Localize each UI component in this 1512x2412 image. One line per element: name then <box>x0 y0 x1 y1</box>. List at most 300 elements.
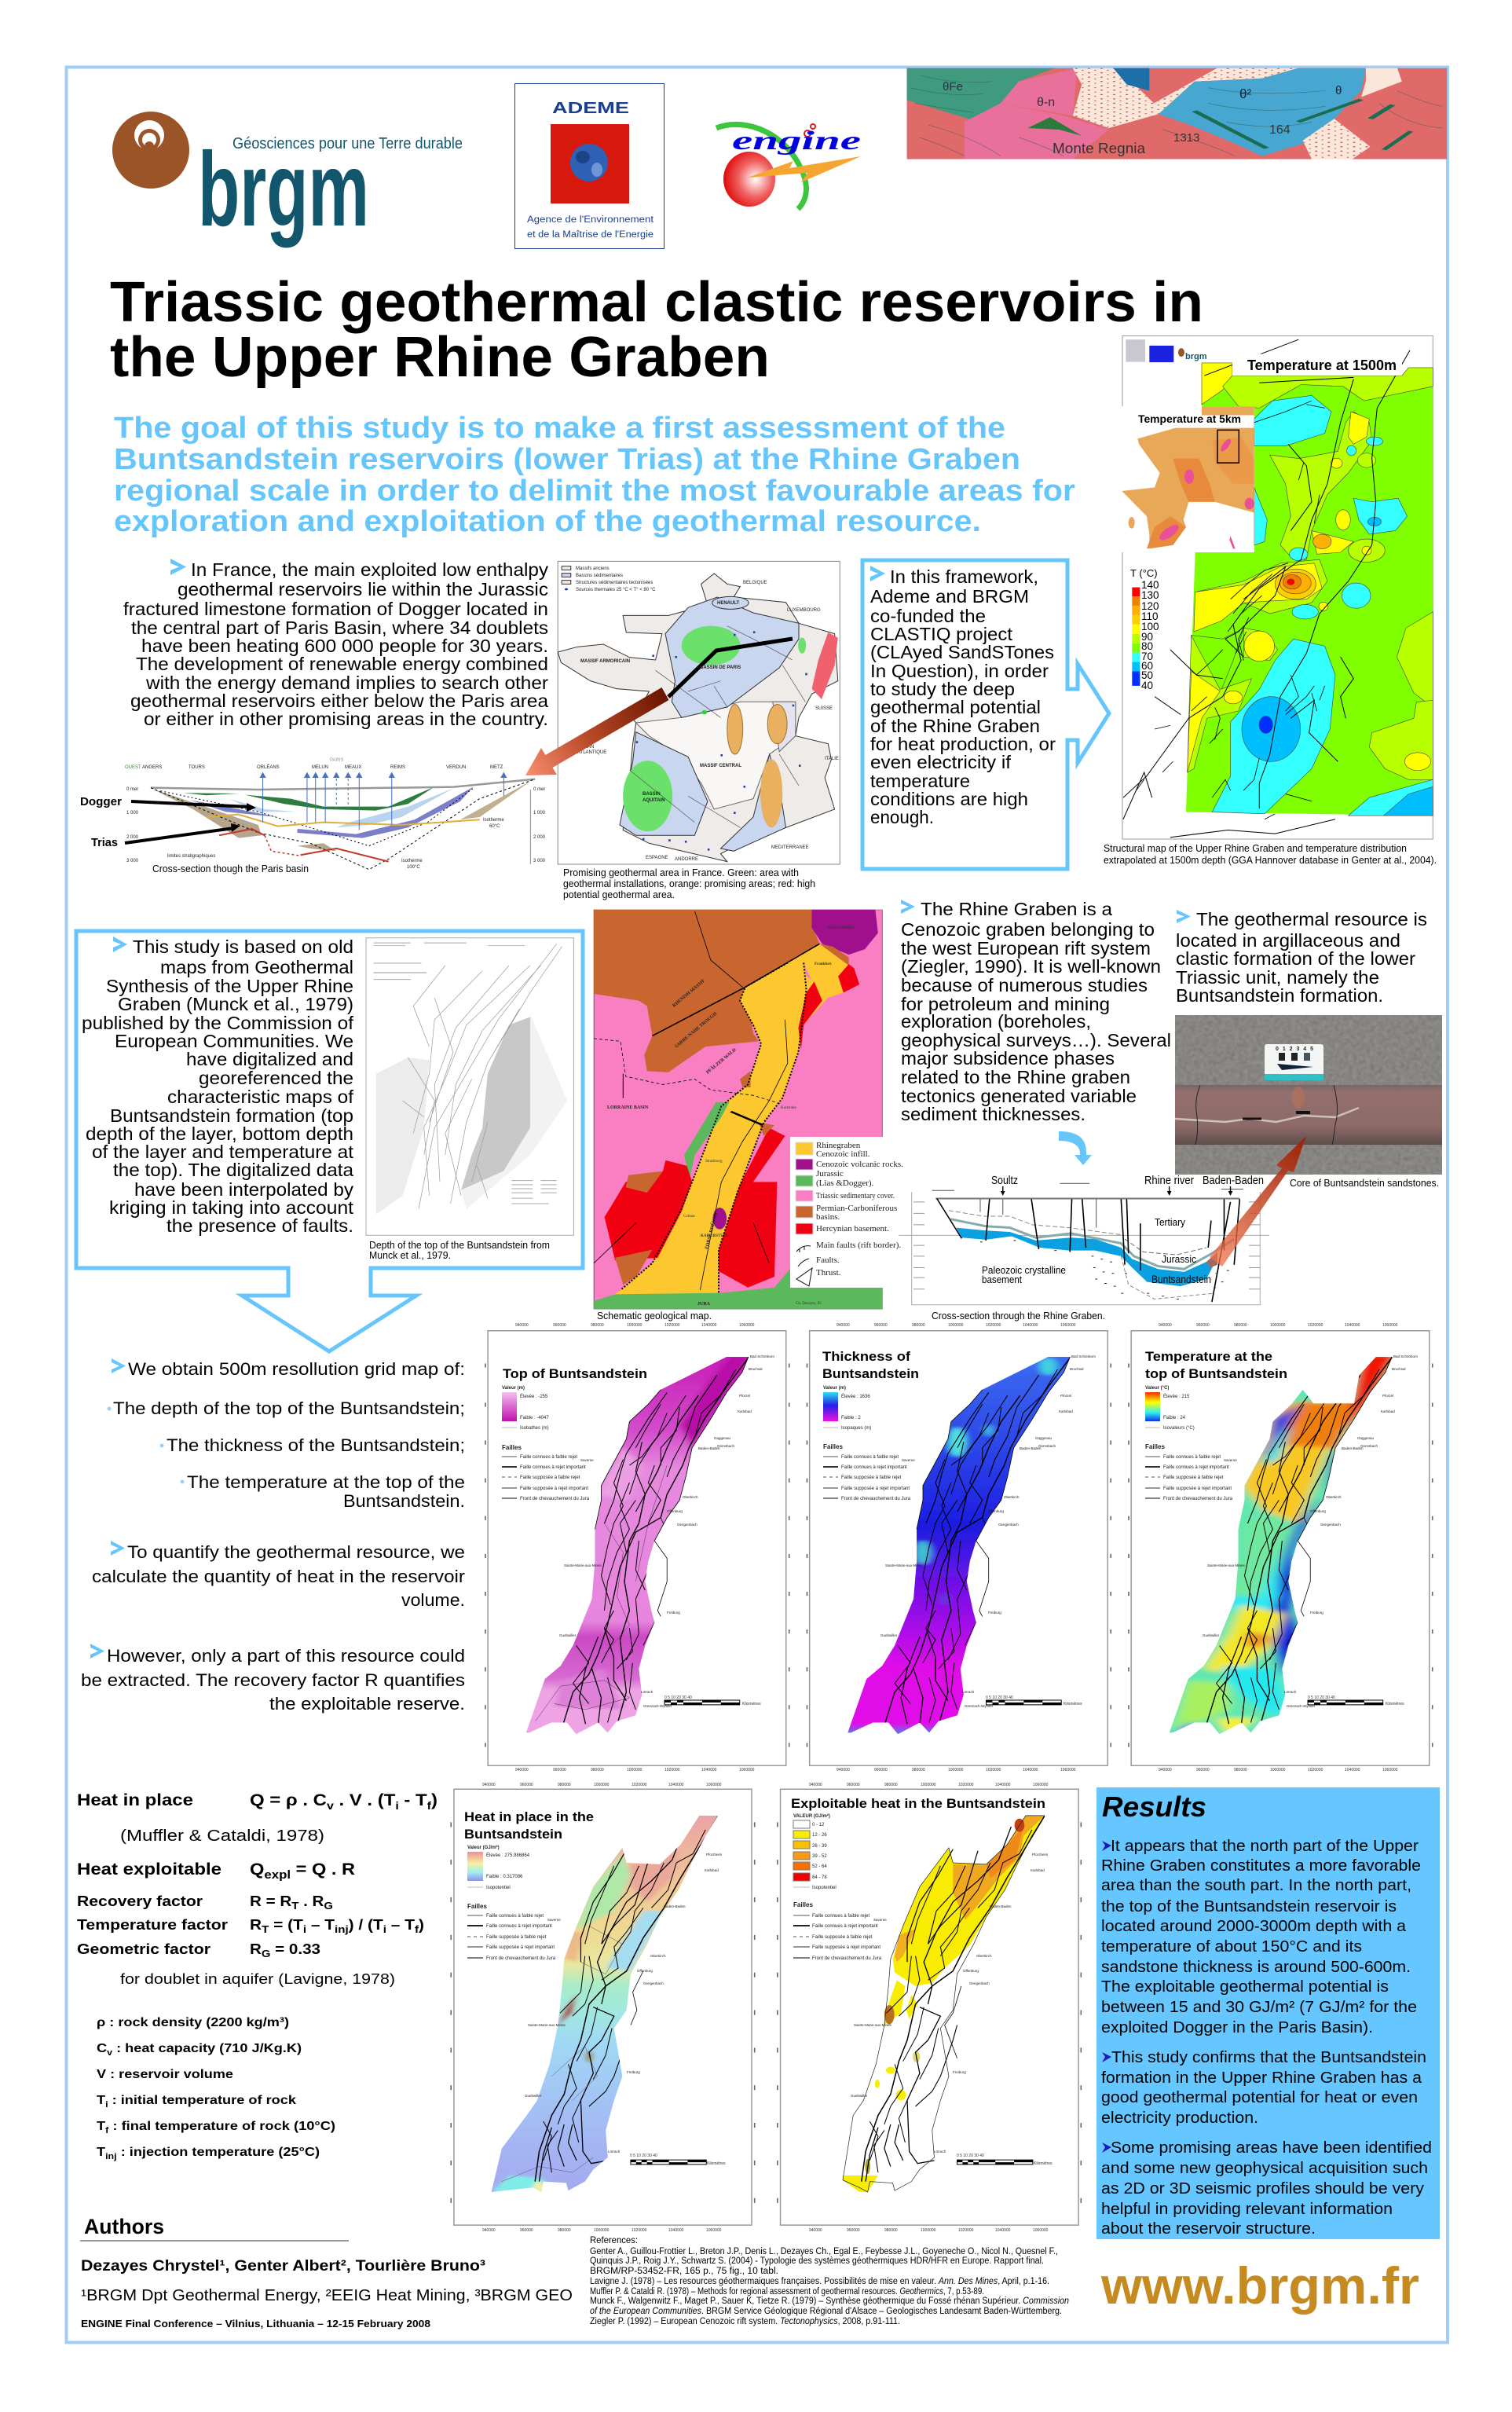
city labels: Saverne <box>547 1918 561 1922</box>
text block: Rhine Graben description: tectonics generated variable <box>901 1086 1137 1106</box>
text block: grid maps and quantities: be extracted. The recovery factor R quantifies <box>81 1670 465 1690</box>
text block: study description: European Communities. We <box>115 1031 353 1051</box>
city labels: Baden-Baden <box>698 1446 720 1450</box>
map legend: Faille connues à faible rejet <box>841 1455 899 1460</box>
map axis and scale labels: 1040000 <box>1345 1768 1360 1772</box>
map axis and scale labels: 940000 <box>482 2228 496 2233</box>
formula: temperature factor: = (T <box>269 1917 303 1933</box>
text block: geothermal resource: Triassic unit, namely the <box>1176 967 1379 988</box>
inset: temperature at 5km <box>1121 406 1254 552</box>
city labels: Gengenbach <box>677 1523 697 1527</box>
map legend: Front de chevauchement du Jura <box>1163 1497 1233 1501</box>
map axis and scale labels: 1020000 <box>664 1323 680 1328</box>
map legend: Isopotentiel <box>812 1886 837 1890</box>
city labels <box>525 1853 723 2154</box>
map: promising geothermal areas in France <box>558 561 840 864</box>
parameter definitions <box>97 2016 335 2161</box>
map axis and scale labels: 980000 <box>1234 1323 1247 1328</box>
heading: results: Results <box>1102 1791 1206 1823</box>
map axis and scale labels: 1060000 <box>706 1783 722 1787</box>
map axis and scale labels: 940000 <box>1159 1768 1172 1772</box>
formula: heat in place: - T <box>399 1791 427 1809</box>
map legend: Élevée : 1636 <box>841 1394 870 1399</box>
map axis and scale labels: 1060000 <box>1382 1768 1398 1772</box>
legend: temperature: 110 <box>1141 610 1159 622</box>
result 3 <box>1101 2139 1432 2238</box>
city labels: Grenzach-Wyhlen <box>1287 1704 1315 1708</box>
text block: CLASTIQ: enough. <box>870 807 934 827</box>
text block: Rhine Graben description: because of numerous studies <box>901 975 1148 995</box>
parameter definitions: T <box>97 2146 104 2159</box>
map labels: MASSIF ARMORICAIN <box>580 659 630 664</box>
map axis and scale labels: 0 5 10 20 30 40 <box>957 2154 984 2158</box>
legend: geology: (Lias &Dogger). <box>816 1179 874 1188</box>
city labels: Offenburg <box>637 1969 653 1973</box>
cross-section labels: Isotherme <box>401 859 423 863</box>
references: Genter A., Guillou-Frottier L., Breton J.P., Denis L., Dezayes Ch., Egal E., Feybesse J.L., Goyeneche O., Nicol N., Quesnel F., <box>590 2247 1058 2256</box>
city labels: Freiburg <box>1310 1611 1323 1615</box>
city labels: Pforzel <box>1060 1394 1071 1398</box>
cross-section labels: 3 000 <box>533 859 546 863</box>
legend: temperature: 130 <box>1141 589 1159 601</box>
geological map banner: θ <box>1335 84 1342 97</box>
map axis and scale labels: 940000 <box>1159 1323 1172 1328</box>
panel: results <box>1096 1787 1440 2239</box>
city labels: Baden-Baden <box>664 1904 686 1908</box>
city labels: Sainte-Marie-aux-Mines <box>528 2023 566 2027</box>
bullet list: The thickness of the Buntsandstein; <box>167 1435 465 1455</box>
map axis and scale labels: 940000 <box>515 1768 529 1772</box>
map legend: Faille supposée à faible rejet <box>1163 1475 1224 1480</box>
map: thickness of Buntsandstein <box>807 1323 1111 1772</box>
goal statement: exploration and exploitation of the geothermal resource. <box>114 505 981 538</box>
map axis and scale labels: 0 5 10 20 30 40 <box>1308 1695 1335 1700</box>
city labels <box>851 1853 1049 2154</box>
text block: CLASTIQ: geothermal potential <box>870 697 1041 717</box>
formula: temperature factor: Temperature factor <box>77 1917 228 1933</box>
title: temperature at 5km: Temperature at 5km <box>1138 413 1241 425</box>
map labels: ITALIE <box>825 757 839 761</box>
bullet list <box>107 1398 465 1511</box>
text block: study description: the top). The digitalized data <box>113 1160 353 1180</box>
formula: geometric factor <box>77 1941 320 1959</box>
logo: ADEME: et de la Maîtrise de l'Energie <box>527 230 653 240</box>
text block: grid maps and quantities: volume. <box>401 1590 465 1610</box>
formula: heat exploitable: Heat exploitable <box>77 1860 221 1879</box>
city labels: Baden-Baden <box>1342 1446 1364 1450</box>
map labels: BASSIN <box>643 792 661 797</box>
map labels <box>576 566 839 862</box>
text block: study description: Graben (Munck et al., 1979) <box>118 994 353 1014</box>
text block: Rhine Graben description: major subsidence phases <box>901 1048 1115 1069</box>
map axis and scale labels: 1000000 <box>627 1768 643 1772</box>
bullet list: The depth of the top of the Buntsandstein; <box>113 1398 465 1418</box>
text block: Rhine Graben description <box>901 899 1171 1124</box>
photo: sandstone core <box>1175 1015 1442 1175</box>
legend: geology: Permian-Carboniferous <box>816 1204 897 1213</box>
map labels: AQUITAIN <box>643 798 665 803</box>
text block: CLASTIQ: of the Rhine Graben <box>870 716 1040 736</box>
map axis and scale labels: 940000 <box>809 2228 822 2233</box>
text block: CLASTIQ: conditions are high <box>870 789 1028 809</box>
map legend: Isovaleurs (°C) <box>1163 1426 1195 1431</box>
tagline: Géosciences pour une Terre durable <box>232 135 463 152</box>
caption: core: Core of Buntsandstein sandstones. <box>1290 1177 1439 1189</box>
geological map labels: Colmar <box>683 1215 695 1219</box>
city labels <box>1203 1354 1419 1708</box>
map legend <box>467 1845 556 1961</box>
text block: France low enthalpy <box>123 559 549 729</box>
text block: grid maps and quantities: However, only a part of this resource could <box>107 1646 465 1666</box>
legend: temperature: 120 <box>1141 600 1159 612</box>
text block: grid maps and quantities: To quantify the geothermal resource, we <box>127 1542 465 1562</box>
section labels: Jurassic <box>1162 1253 1196 1265</box>
parameter definitions: f <box>105 2126 109 2135</box>
cross-section labels: 3 000 <box>126 859 139 863</box>
map axis and scale labels <box>809 1783 1053 2233</box>
caption: France map <box>563 867 815 900</box>
formula: recovery factor: . R <box>298 1893 324 1909</box>
geological map labels: JURA <box>697 1302 711 1307</box>
formula: heat exploitable: expl <box>264 1868 291 1882</box>
geological map banner: θFe <box>943 80 963 93</box>
map legend: 52 - 64 <box>812 1864 827 1869</box>
map axis and scale labels: 0 5 10 20 30 40 <box>630 2154 657 2158</box>
city labels: Saverne <box>902 1458 915 1462</box>
references: Muffler P. & Cataldi R. (1978) – Methods for regional assessment of geothermal resources. Geothermics, 7, p.53-89. <box>590 2287 984 2297</box>
result 1: sandstone thickness is around 500-600m. <box>1101 1959 1411 1976</box>
icon: chevron <box>111 1541 125 1556</box>
section labels: Rhine river <box>1144 1174 1194 1187</box>
city labels: Gengenbach <box>1320 1523 1341 1527</box>
result 2: electricity production. <box>1101 2110 1258 2127</box>
map axis and scale labels: 1000000 <box>948 1323 964 1328</box>
references: References: <box>590 2234 638 2245</box>
map axis and scale labels: 1060000 <box>1033 2228 1049 2233</box>
bullet list: Buntsandstein. <box>343 1491 465 1511</box>
geological map labels: SARRE-NAHE TROUGH <box>674 1011 718 1050</box>
colour scale <box>1132 588 1140 596</box>
city labels: Freiburg <box>988 1611 1001 1615</box>
logo: ENGINE <box>716 124 861 209</box>
city labels <box>559 1354 775 1708</box>
map legend: Faille connues à rejet important <box>841 1465 907 1470</box>
section labels: basement <box>982 1274 1022 1285</box>
formula: heat in place: ) <box>431 1791 437 1809</box>
map legend: 12 - 26 <box>812 1833 827 1838</box>
references: Quinquis J.P., Roig J.Y., Schwartz S. (2004) - Typologie des systèmes géothermiques HDR/HFR en Europe. Rapport final. <box>590 2256 1044 2266</box>
core scale card <box>1265 1044 1323 1080</box>
map axis and scale labels <box>837 1323 1082 1772</box>
map legend: Faille supposée à faible rejet <box>841 1475 902 1480</box>
city labels: Bruchsal <box>749 1367 763 1371</box>
map title <box>1145 1349 1287 1381</box>
map axis and scale labels: 1000000 <box>594 1783 610 1787</box>
result 1: located around 2000-3000m depth with a <box>1101 1918 1407 1935</box>
text block: grid maps and quantities: the exploitable reserve. <box>269 1694 465 1714</box>
legend: geology: Rhinegraben <box>816 1141 861 1150</box>
legend: temperature: 100 <box>1141 621 1159 632</box>
cross-section labels <box>125 758 546 870</box>
map legend: 39 - 52 <box>812 1854 827 1859</box>
map axis and scale labels: 980000 <box>912 1323 925 1328</box>
caption: Munck map: Munck et al., 1979. <box>369 1249 451 1261</box>
city labels: Saverne <box>580 1458 594 1462</box>
text block: CLASTIQ: In Question), in order <box>870 661 1049 681</box>
city labels: Gengenbach <box>969 1981 990 1985</box>
map axis and scale labels: 1000000 <box>921 2228 936 2233</box>
city labels: Sainte-Marie-aux-Mines <box>564 1563 602 1567</box>
legend: geology: Jurassic <box>816 1169 844 1179</box>
map axis and scale labels: 1000000 <box>1270 1323 1286 1328</box>
map axis and scale labels: 1020000 <box>958 2228 974 2233</box>
text block: CLASTIQ: Ademe and BRGM <box>870 586 1029 607</box>
formula: temperature factor <box>77 1917 424 1935</box>
caption: France map: potential geothermal area. <box>563 889 675 900</box>
formula: recovery factor: Recovery factor <box>77 1893 203 1909</box>
icon: chevron <box>113 937 127 952</box>
formula: geometric factor: G <box>262 1948 270 1959</box>
map axis and scale labels: 1040000 <box>701 1323 717 1328</box>
map axis and scale labels: 980000 <box>558 1783 571 1787</box>
parameter definitions: T <box>97 2094 104 2107</box>
city labels: Pforzel <box>1382 1394 1393 1398</box>
result 1: between 15 and 30 GJ/m² (7 GJ/m² for the <box>1101 1999 1417 2016</box>
city labels: Guebwiller <box>851 2094 868 2098</box>
result 1: It appears that the north part of the Upper <box>1111 1838 1419 1855</box>
legend: temperature: 50 <box>1141 669 1153 681</box>
map: depth of the top of the Buntsandstein (Munck) <box>366 938 573 1235</box>
map axis and scale labels: 980000 <box>884 2228 898 2233</box>
text block: geothermal resource <box>1176 909 1427 1006</box>
legend: geology: Thrust. <box>816 1268 841 1277</box>
survey line on map <box>668 639 793 697</box>
map axis and scale labels: 960000 <box>847 1783 860 1787</box>
map: top of Buntsandstein <box>485 1323 789 1772</box>
result 3: about the reservoir structure. <box>1101 2220 1316 2238</box>
map labels: Structures sédimentaires tectonisées <box>576 581 653 585</box>
formula: temperature factor: R <box>250 1917 260 1933</box>
formula: recovery factor: R = R <box>250 1893 287 1909</box>
panel: CLASTIQ project arrow box <box>862 560 1109 869</box>
map axis and scale labels: 960000 <box>520 1783 533 1787</box>
map axis and scale labels: 1000000 <box>1270 1768 1286 1772</box>
text block: CLASTIQ: (CLAyed SandSTones <box>870 642 1054 662</box>
text block: geothermal resource: Buntsandstein formation. <box>1176 985 1383 1006</box>
map legend: Faible : 24 <box>1163 1416 1186 1420</box>
legend: geology: Cenozoic volcanic rocks. <box>816 1160 903 1169</box>
city labels: Freiburg <box>627 2070 640 2074</box>
cross-section labels: OUEST <box>125 765 141 770</box>
geological map banner <box>907 68 1447 159</box>
text block: Rhine Graben description: sediment thicknesses. <box>901 1104 1085 1124</box>
city labels <box>880 1354 1096 1708</box>
map axis and scale labels: 960000 <box>520 2228 533 2233</box>
references: Lavigne J. (1978) – Les resources géothermaiques françaises. Possibilités de mise en valeur. Ann. Des Mines, April, p.1-16. <box>590 2277 1049 2286</box>
formula: temperature factor: inj <box>335 1923 349 1935</box>
map axis and scale labels: Kilomètres <box>1064 1702 1082 1706</box>
caption: geological map: Schematic geological map. <box>597 1310 712 1321</box>
map labels: SUISSE <box>815 706 833 711</box>
references: Munck F., Walgenwitz F., Maget P., Sauer K, Tietze R. (1979) – Synthèse géothermique du Fossé rhénan Supérieur. Commission <box>590 2297 1069 2306</box>
map labels: MEDITERRANEE <box>771 845 809 850</box>
legend: temperature: 70 <box>1141 651 1153 662</box>
map legend: 64 - 78 <box>812 1875 827 1880</box>
citation: Lavigne: for doublet in aquifer (Lavigne, 1978) <box>120 1971 395 1987</box>
formula: heat in place: . V . (T <box>334 1791 396 1809</box>
city labels: Gernsbach <box>1360 1444 1378 1448</box>
text block: geothermal resource: located in argillaceous and <box>1176 930 1400 951</box>
text block: grid maps and quantities: We obtain 500m resollution grid map of: <box>128 1359 465 1379</box>
result 3: helpful in providing relevant information <box>1101 2201 1393 2218</box>
title: temperature at 1500m: Temperature at 1500m <box>1247 357 1397 373</box>
map labels: BELGIQUE <box>743 581 767 585</box>
panel: study data arrow box <box>76 931 583 1351</box>
formula: temperature factor: – T <box>306 1917 335 1933</box>
map legend: Faible : -4047 <box>520 1416 549 1420</box>
geological map labels <box>607 926 855 1307</box>
map labels: ANDORRE <box>675 857 698 862</box>
result 2: This study confirms that the Buntsandstein <box>1111 2049 1426 2066</box>
map legend: Faille supposée à rejet important <box>841 1486 910 1491</box>
city labels: Guebwiller <box>880 1633 898 1637</box>
map axis and scale labels: 1040000 <box>995 1783 1011 1787</box>
caption: Munck map <box>369 1239 550 1261</box>
map axis and scale labels: Kilomètres <box>742 1702 761 1706</box>
legend: temperature: 80 <box>1141 640 1153 652</box>
formula: temperature factor: T <box>262 1923 269 1935</box>
city labels: Karlsbad <box>705 1868 719 1872</box>
result 2: formation in the Upper Rhine Graben has a <box>1101 2069 1422 2087</box>
map axis and scale labels: 1060000 <box>1033 1783 1049 1787</box>
legend: geology: Faults. <box>816 1255 840 1265</box>
text block: study description: depth of the layer, bottom depth <box>86 1124 353 1144</box>
map legend: Faille connues à rejet important <box>520 1465 586 1470</box>
text block: Rhine Graben description: Cenozoic graben belonging to <box>901 919 1155 940</box>
geological map banner: 164 <box>1269 123 1291 137</box>
city labels: Sainte-Marie-aux-Mines <box>1207 1563 1246 1567</box>
map axis and scale labels: 1040000 <box>668 1783 684 1787</box>
text block: Rhine Graben description: related to the Rhine graben <box>901 1067 1130 1087</box>
text block: study description: maps from Geothermal <box>160 957 353 977</box>
cross-section labels: 100°C <box>407 865 420 870</box>
map legend: Élevée : -255 <box>520 1394 548 1399</box>
map legend: VALEUR (GJ/m²) <box>793 1813 830 1819</box>
map title: Heat in place in the <box>464 1809 594 1824</box>
geological map labels: RHENISH MASSIF <box>672 978 706 1009</box>
formula: heat in place: Heat in place <box>77 1791 193 1809</box>
map axis and scale labels: 980000 <box>884 1783 898 1787</box>
map axis and scale labels: 1020000 <box>664 1768 680 1772</box>
map legend: Élevée : 275.986864 <box>486 1853 530 1858</box>
map title <box>822 1349 919 1381</box>
geological map labels: Karlsruhe <box>781 1106 796 1110</box>
city labels: Bruchsal <box>1392 1367 1406 1371</box>
map axis and scale labels: 940000 <box>482 1783 496 1787</box>
result 1: exploited Dogger in the Paris Basin). <box>1101 2019 1373 2036</box>
map axis and scale labels: 960000 <box>553 1768 566 1772</box>
map legend: Isopaques (m) <box>841 1426 871 1431</box>
caption: temperature map <box>1104 842 1437 866</box>
map legend: Faille supposée à faible rejet <box>812 1935 873 1940</box>
geological map labels: Frankfurt <box>815 962 832 966</box>
legend: geology <box>790 1137 903 1288</box>
map axis and scale labels: 0 5 10 20 30 40 <box>986 1695 1013 1700</box>
map legend: Faille connues à faible rejet <box>1163 1455 1221 1460</box>
cross-section labels: METZ <box>490 765 503 770</box>
text block: France low enthalpy: fractured limestone formation of Dogger located in <box>123 599 548 619</box>
map legend: Front de chevauchement du Jura <box>841 1497 911 1501</box>
title <box>110 271 1203 389</box>
cross-section labels: VERDUN <box>446 765 466 770</box>
city labels: Sainte-Marie-aux-Mines <box>854 2023 892 2027</box>
cross-section labels: 60°C <box>489 824 500 829</box>
map axis and scale labels: 1020000 <box>632 2228 647 2233</box>
icon: chevron <box>90 1644 104 1659</box>
text block: CLASTIQ: In this framework, <box>890 566 1038 587</box>
city labels: Oberkirch <box>683 1495 698 1499</box>
map labels: BASSIN DE PARIS <box>700 665 741 670</box>
geological map labels: KAISERSTUHL <box>701 1234 730 1238</box>
map axis and scale labels <box>1159 1323 1404 1772</box>
cross-section labels: Isotherme <box>483 818 504 823</box>
legend: temperature: 90 <box>1141 631 1153 643</box>
map title: Buntsandstein <box>464 1827 562 1842</box>
bullet list: The temperature at the top of the <box>187 1472 465 1492</box>
map axis and scale labels: 1040000 <box>668 2228 684 2233</box>
city labels: Gengenbach <box>998 1523 1019 1527</box>
author affiliations: ¹BRGM Dpt Geothermal Energy, ²EEIG Heat Mining, ³BRGM GEO <box>81 2287 573 2304</box>
map axis and scale labels: 1060000 <box>739 1768 755 1772</box>
geological map labels: Strasbourg <box>705 1160 723 1164</box>
map axis and scale labels: 940000 <box>837 1768 850 1772</box>
city labels: Bad Schönborn <box>1071 1354 1096 1358</box>
icon: chevron <box>901 900 915 914</box>
city labels: Baden-Baden <box>990 1904 1012 1908</box>
map legend: Front de chevauchement du Jura <box>812 1956 882 1961</box>
section labels: Paleozoic crystalline <box>982 1264 1066 1276</box>
city labels: Gernsbach <box>1038 1444 1056 1448</box>
map labels: Massifs anciens <box>576 566 610 571</box>
caption: temperature map: Structural map of the Upper Rhine Graben and temperature distribution <box>1104 842 1407 854</box>
city labels: Karlsbad <box>1031 1868 1045 1872</box>
cross-section labels: 2 000 <box>533 835 546 840</box>
icon: chevron <box>1177 910 1191 923</box>
text block: geothermal resource: clastic formation of the lower <box>1176 948 1415 969</box>
chart: Paris basin cross-section <box>80 758 546 874</box>
map legend: Valeur (m) <box>502 1386 525 1391</box>
text block: France low enthalpy: or either in other promising areas in the country. <box>144 709 548 729</box>
geological map banner: 1313 <box>1173 131 1199 145</box>
city labels: Saverne <box>1224 1458 1237 1462</box>
geological map labels: FORSE RHÉNAN <box>703 1211 719 1250</box>
text block: study description: characteristic maps of <box>167 1087 354 1107</box>
map legend: Élevée : 215 <box>1163 1394 1190 1399</box>
city labels: Gaggenau <box>1357 1436 1375 1440</box>
formula: temperature factor: – T <box>386 1917 415 1933</box>
map axis and scale labels: 940000 <box>515 1323 529 1328</box>
conference line: ENGINE Final Conference – Vilnius, Lithuania – 12-15 February 2008 <box>81 2318 430 2330</box>
map axis and scale labels: 1000000 <box>948 1768 964 1772</box>
map axis and scale labels <box>482 1783 726 2233</box>
map legend <box>823 1386 911 1501</box>
result 1: The exploitable geothermal potential is <box>1101 1978 1389 1996</box>
legend: geology: Main faults (rift border). <box>816 1241 901 1250</box>
city labels: Bruchsal <box>1070 1367 1084 1371</box>
map axis and scale labels: 940000 <box>837 1323 850 1328</box>
goal statement <box>114 412 1075 538</box>
references: Ziegler P. (1992) – European Cenozoic rift system. Tectonophysics, 2008, p.91-111. <box>590 2317 900 2326</box>
